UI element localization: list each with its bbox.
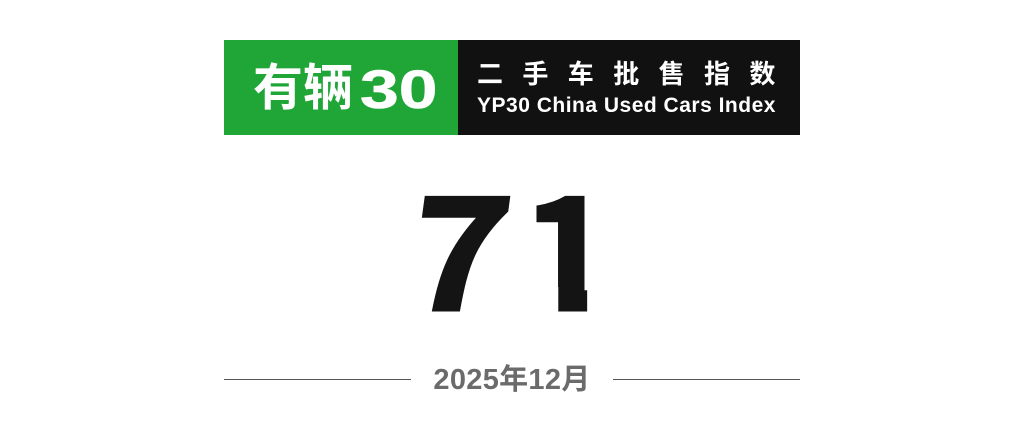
- brand title: [253, 48, 438, 120]
- black subtitle panel: [458, 40, 800, 135]
- date label: 2025年12月: [433, 364, 591, 396]
- right rule: [613, 379, 800, 380]
- index value: 1: [521, 134, 615, 354]
- index value: [397, 134, 588, 354]
- index value: 7: [397, 134, 525, 354]
- header banner: [224, 40, 800, 135]
- Chinese subtitle: 二手车批售指数: [477, 59, 795, 89]
- green brand panel: [224, 40, 458, 135]
- brand title: 有辆: [253, 48, 353, 120]
- English subtitle: YP30 China Used Cars Index: [477, 94, 776, 117]
- brand title: 30: [360, 60, 438, 120]
- left rule: [224, 379, 411, 380]
